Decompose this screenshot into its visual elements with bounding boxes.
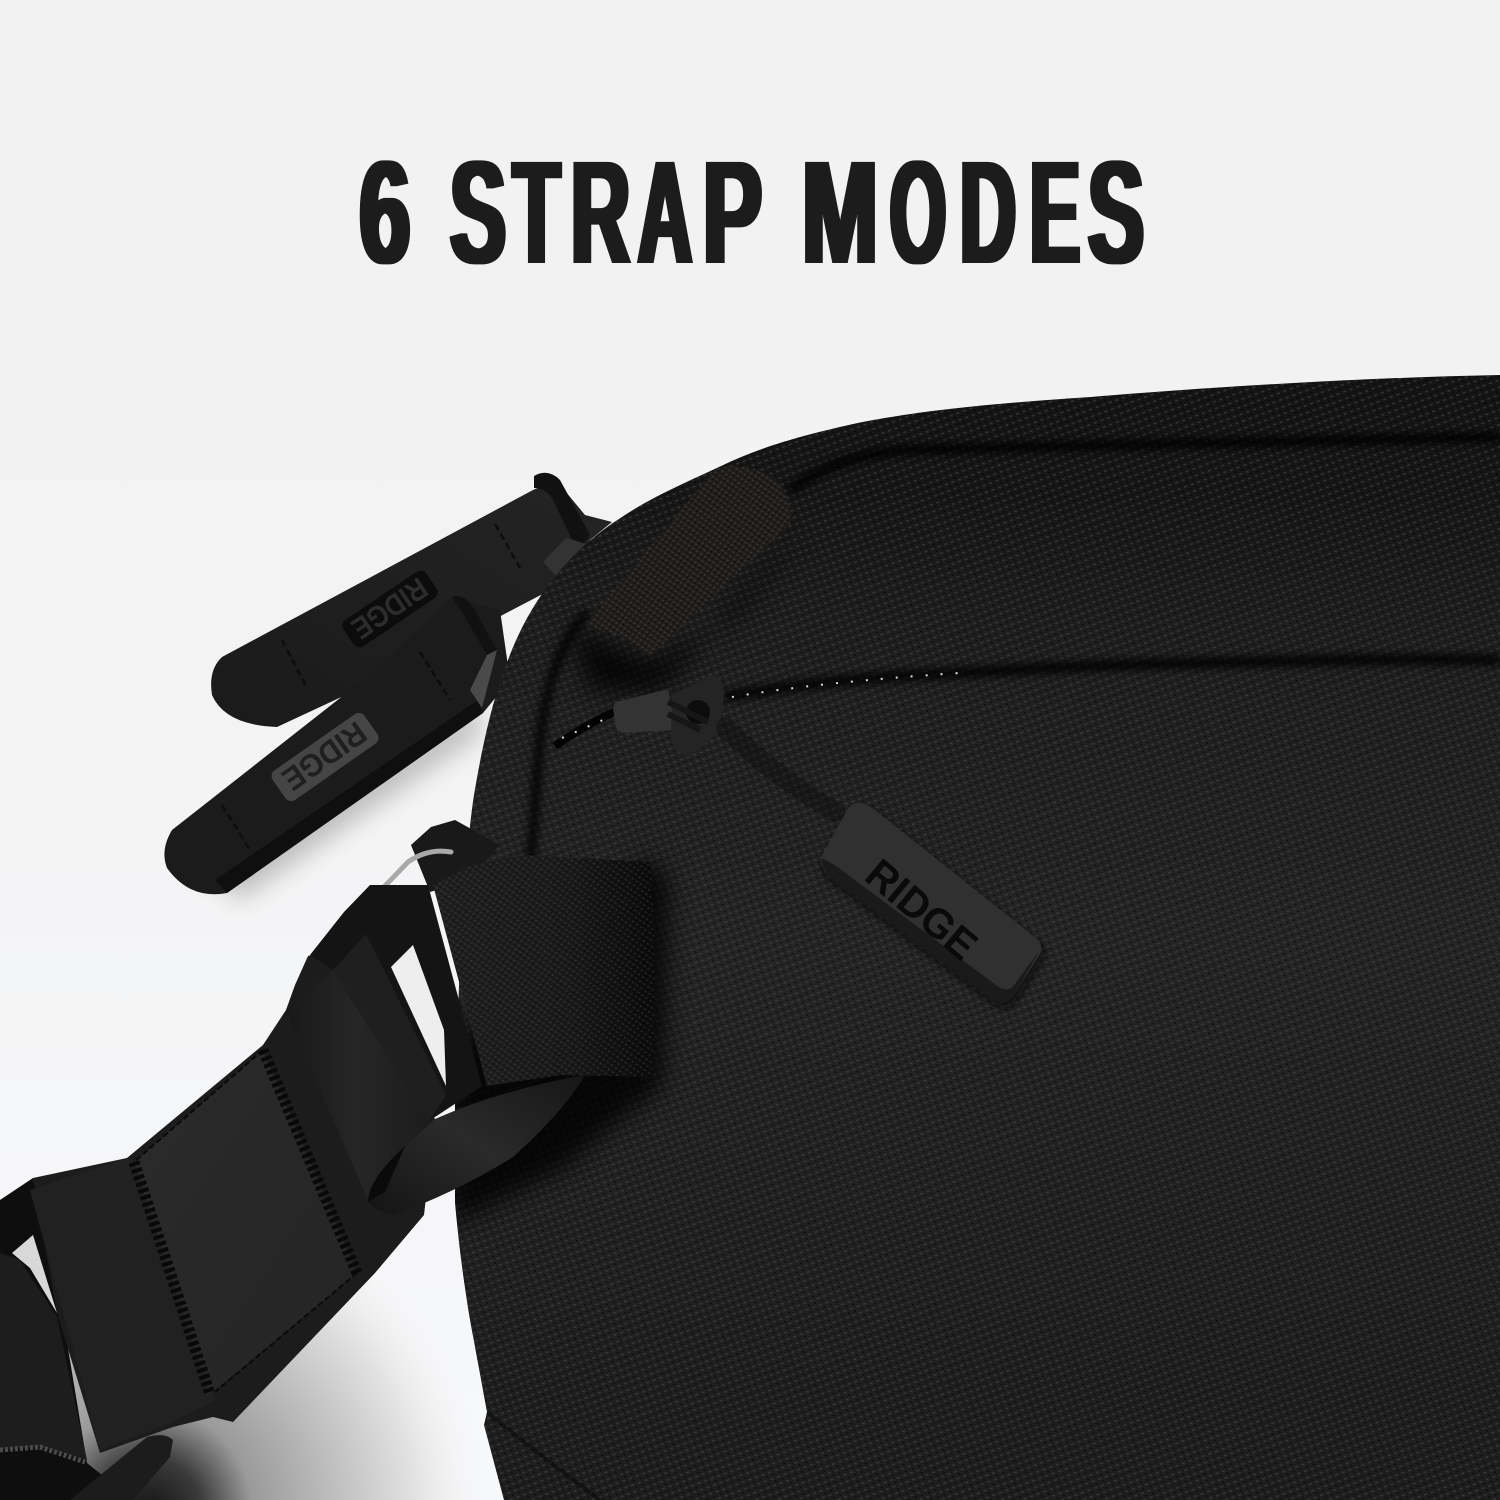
title: A (638, 131, 692, 295)
bag body (440, 370, 1500, 1500)
title: M (802, 131, 878, 295)
strap fold highlight (286, 970, 429, 1200)
title: S (1088, 131, 1144, 295)
upper tab metal ring (534, 473, 590, 552)
upper tab RIDGE badge: RIDGE (345, 571, 433, 645)
title: P (703, 131, 762, 295)
stitched panel (134, 1050, 357, 1394)
lower seam (487, 1412, 600, 1500)
plastic buckle (310, 885, 482, 1121)
lower buckle window (12, 1235, 57, 1313)
title: 6 (359, 131, 410, 295)
strap: leather band (30, 950, 435, 1453)
zipper pull (613, 675, 724, 757)
title: D (960, 131, 1016, 295)
fold above zipper (724, 659, 1500, 697)
upper tab connector (543, 538, 590, 586)
buckle window (391, 945, 446, 1086)
top rim groove (790, 437, 1500, 490)
attachment loop (585, 467, 791, 657)
strap tab: lower leather tab (164, 596, 510, 894)
left piping groove (530, 612, 588, 862)
lower metal ring (70, 1435, 173, 1500)
title: R (571, 131, 630, 295)
title: E (1030, 131, 1080, 295)
zipper tag with RIDGE logo: RIDGE (857, 850, 987, 969)
lower-left buckle and webbing (0, 1178, 173, 1500)
zipper tag with RIDGE logo (821, 803, 1043, 1007)
title: T (513, 131, 560, 295)
shadow under loop (570, 582, 762, 700)
shadow: under strap (0, 705, 500, 1500)
lower tab RIDGE badge: RIDGE (276, 714, 373, 798)
strap tab: upper leather tab (211, 473, 612, 727)
title: O (890, 131, 946, 295)
zipper cord knot (668, 702, 708, 730)
plastic disc anchor (368, 1075, 585, 1215)
lower webbing (0, 1253, 87, 1460)
webbing loop (433, 855, 655, 1086)
zipper cord (726, 728, 835, 812)
title: S (450, 131, 506, 295)
zipper teeth right (732, 673, 960, 697)
ring connector (358, 820, 500, 914)
title (359, 131, 1144, 295)
strap bottom fold (30, 1158, 215, 1450)
lower tab metal ring (452, 596, 497, 708)
shadow beside strap (450, 858, 668, 1225)
zipper teeth left (555, 712, 615, 746)
